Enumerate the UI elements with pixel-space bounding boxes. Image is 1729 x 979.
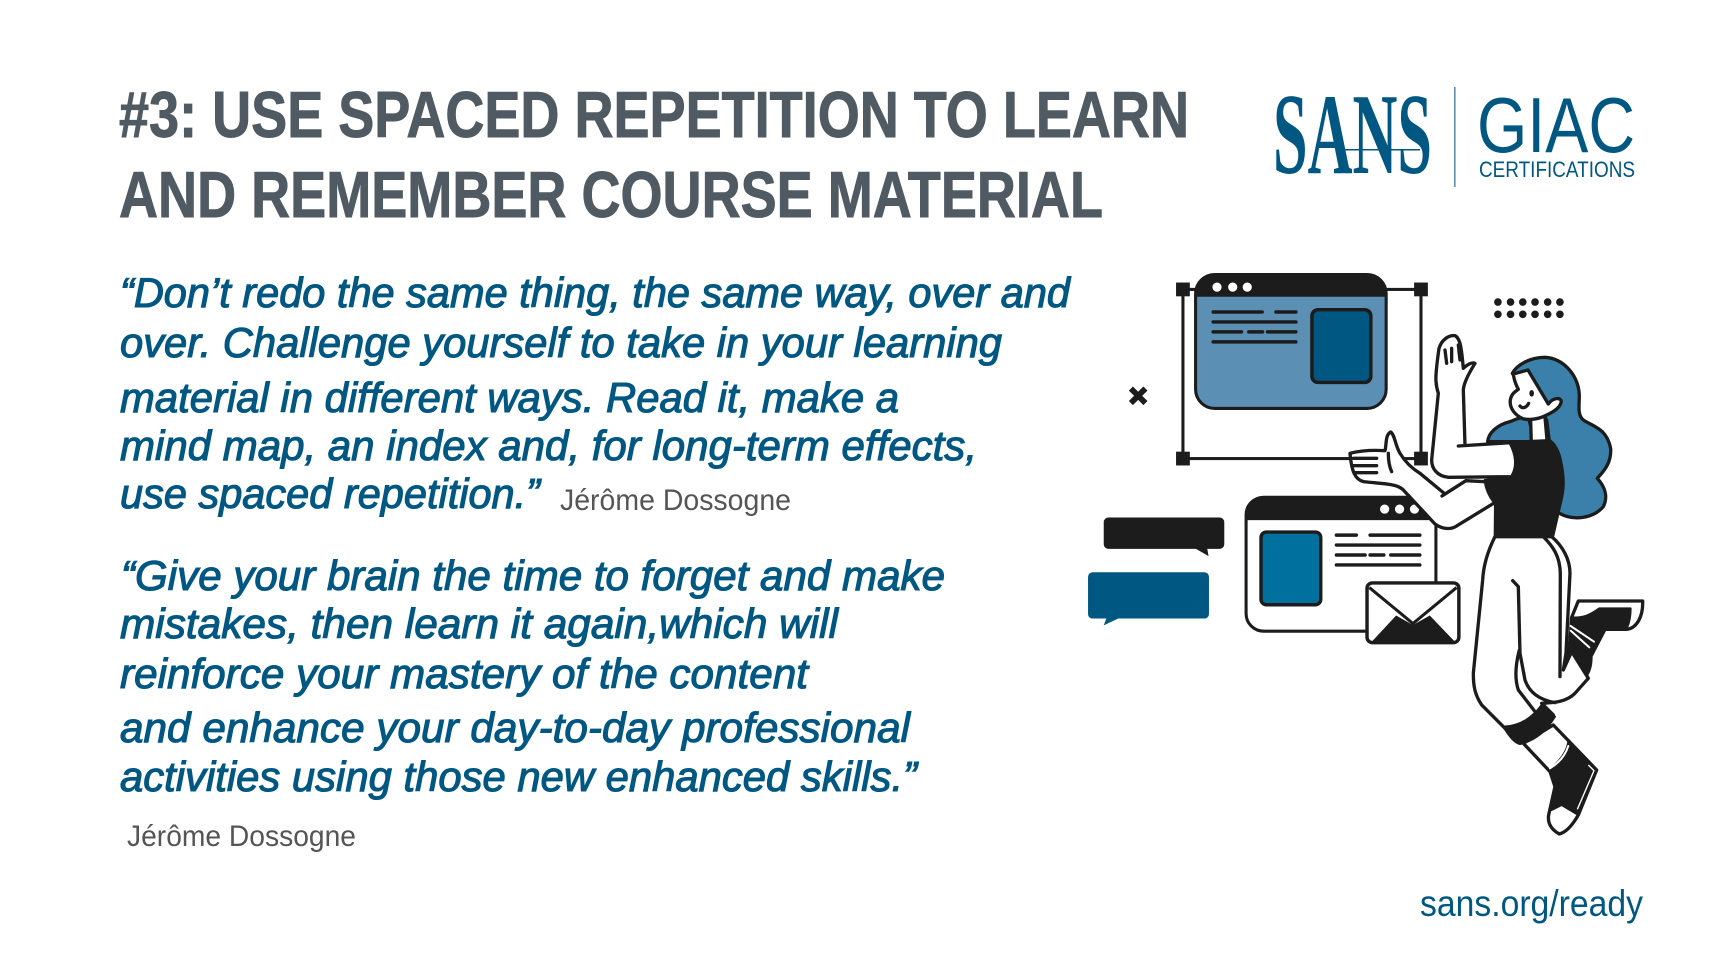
shirt <box>1485 440 1564 537</box>
icon: close mark <box>1131 389 1145 403</box>
icon: blue speech bubble <box>1088 572 1209 625</box>
icon: envelope <box>1367 583 1459 643</box>
trouser cuff <box>1503 705 1555 744</box>
quote two: and enhance your day-to-day professional <box>120 704 912 751</box>
quote one: use spaced repetition.” <box>120 470 542 517</box>
quote one: over. Challenge yourself to take in your learning <box>120 319 1002 366</box>
hanging leg and shoe <box>1523 725 1597 834</box>
logo: SANS GIAC Certifications: SANS <box>1273 71 1432 199</box>
title <box>119 78 1189 231</box>
quote one: material in different ways. Read it, make a <box>120 374 899 421</box>
quote two: reinforce your mastery of the content <box>120 650 810 697</box>
title: #3: USE SPACED REPETITION TO LEARN <box>119 78 1189 151</box>
quote two: mistakes, then learn it again,which will <box>120 600 840 647</box>
raised hand fingers <box>1445 345 1460 363</box>
icon: blue browser window <box>1196 274 1386 408</box>
figure lower body <box>1473 537 1643 834</box>
trousers <box>1473 537 1588 728</box>
illustration <box>1088 274 1643 834</box>
quote two <box>120 552 945 800</box>
raised arm <box>1432 336 1516 477</box>
attribution one: Jérôme Dossogne <box>560 484 791 517</box>
quote two: “Give your brain the time to forget and make <box>121 552 945 599</box>
website link: sans.org/ready <box>1420 883 1643 924</box>
quote one <box>120 269 1072 517</box>
icon: black speech bubble <box>1104 518 1224 556</box>
figure upper body <box>1350 336 1611 537</box>
quote two: activities using those new enhanced skills.” <box>120 753 919 800</box>
face and neck <box>1510 370 1561 443</box>
icon: white browser window <box>1246 497 1436 631</box>
raised foot <box>1567 601 1643 680</box>
logo: SANS GIAC Certifications: GIAC <box>1477 81 1635 169</box>
quote one: mind map, an index and, for long-term effects, <box>120 422 977 469</box>
icon: dot grid <box>1494 298 1564 318</box>
figure: woman <box>1350 336 1643 834</box>
windows and icons <box>1088 274 1564 643</box>
reaching hand details <box>1353 453 1466 496</box>
attribution two: Jérôme Dossogne <box>127 820 356 853</box>
hair <box>1488 357 1611 518</box>
quote one: “Don’t redo the same thing, the same way, over and <box>120 269 1072 316</box>
logo: SANS GIAC Certifications: CERTIFICATIONS <box>1479 157 1635 182</box>
reaching arm <box>1350 432 1495 528</box>
selection frame <box>1176 283 1428 465</box>
title: AND REMEMBER COURSE MATERIAL <box>119 158 1103 231</box>
